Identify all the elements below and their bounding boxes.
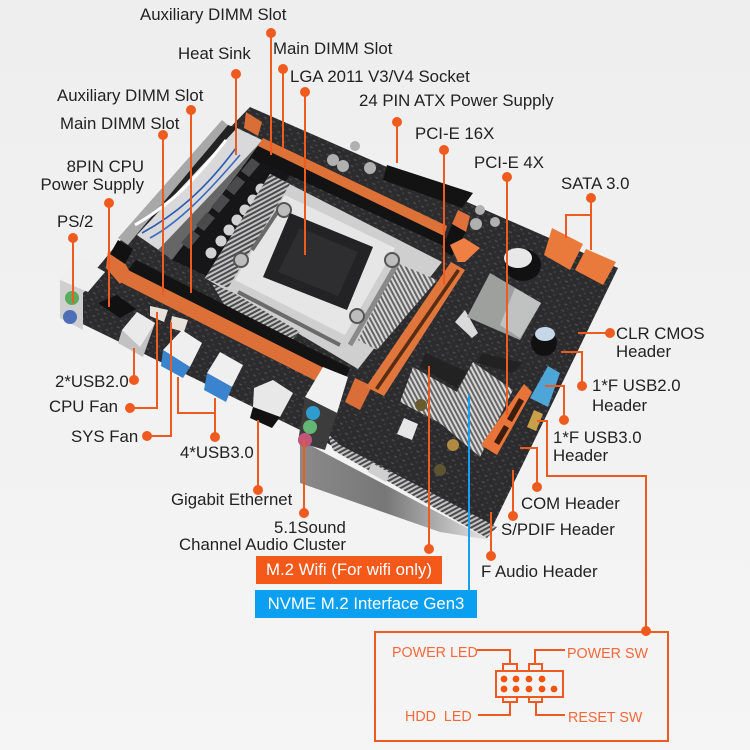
CPU socket cover — [263, 213, 373, 310]
PS/2 ports — [60, 258, 105, 330]
USB 2.0 ports — [118, 312, 155, 357]
line: 4*USB3.0 — [178, 377, 215, 437]
SATA ports — [544, 228, 616, 285]
line: gigabit ethernet — [257, 420, 259, 490]
retention rods — [238, 205, 340, 345]
ATX capacitors — [327, 141, 500, 230]
capacitor row — [206, 184, 266, 258]
label: 24 pin: 24 PIN ATX Power Supply — [359, 91, 554, 110]
label: LGA socket: LGA 2011 V3/V4 Socket — [290, 67, 470, 86]
label: F USB3.0: 1*F USB3.0 — [553, 428, 642, 447]
motherboard — [60, 107, 618, 538]
line: SYS fan — [147, 322, 171, 436]
fan headers — [150, 306, 188, 332]
left auxiliary DIMM slot — [128, 260, 350, 382]
line: 2*USB2.0 — [133, 348, 135, 380]
label: COM header: COM Header — [521, 494, 620, 513]
board shadow — [300, 440, 490, 540]
CMOS battery — [504, 248, 541, 281]
left DIMM latches — [106, 250, 130, 284]
line: auxiliary DIMM top — [270, 33, 272, 155]
label: gigabit ethernet: Gigabit Ethernet — [171, 490, 293, 509]
line: NVME M.2 — [468, 395, 470, 590]
Gigabit ethernet port — [250, 380, 293, 428]
label: power supply: Power Supply — [40, 175, 145, 194]
M.2 centre stripe plate — [440, 362, 513, 457]
label: CLR CMOS header: Header — [616, 342, 671, 361]
line: front panel — [537, 421, 646, 631]
M.2 wifi banner: M.2 Wifi (For wifi only) — [266, 560, 432, 579]
label: CPU fan: CPU Fan — [49, 397, 118, 416]
line: PCI-E 4X — [506, 177, 508, 415]
top main DIMM slot — [258, 138, 447, 236]
chipset heat sink — [467, 273, 541, 340]
label: main DIMM left: Main DIMM Slot — [60, 114, 180, 133]
label: 4*USB3.0: 4*USB3.0 — [180, 443, 254, 462]
leader lines — [73, 33, 646, 631]
line: F USB2.0 — [561, 352, 582, 386]
bottom striped edge — [327, 433, 497, 538]
M.2 wifi banner — [256, 556, 442, 584]
line: 24 pin — [396, 122, 398, 163]
power sw label: POWER SW — [567, 646, 649, 662]
NVME banner: NVME M.2 Interface Gen3 — [268, 594, 464, 613]
top auxiliary DIMM slot — [250, 146, 453, 250]
line: LGA socket — [304, 92, 306, 255]
audio jack cluster — [298, 367, 348, 450]
USB 3.0 front header — [530, 366, 560, 407]
line: CPU fan — [130, 312, 157, 408]
label: audio cluster: Channel Audio Cluster — [179, 535, 346, 554]
line: auxiliary DIMM left — [190, 110, 192, 293]
label: auxiliary DIMM top: Auxiliary DIMM Slot — [140, 5, 287, 24]
label: auxiliary DIMM left: Auxiliary DIMM Slot — [57, 86, 204, 105]
line: SATA — [566, 198, 591, 250]
label: SATA: SATA 3.0 — [561, 174, 629, 193]
reset sw label: RESET SW — [568, 710, 643, 726]
NVME banner — [255, 590, 477, 618]
line: 8 pin — [108, 203, 110, 307]
USB 2.0 front header — [527, 410, 543, 431]
M.2 left stripe plate — [400, 367, 457, 423]
line: M.2 wifi — [428, 366, 430, 549]
label: F USB3.0 header: Header — [553, 446, 608, 465]
panel connector dot — [641, 626, 651, 636]
line: CLR CMOS — [578, 332, 610, 334]
line: audio cluster — [303, 440, 305, 513]
hdd led label: HDD LED — [405, 709, 472, 725]
auxiliary black fin slot — [128, 125, 237, 245]
heat sink — [135, 128, 262, 260]
label: PCI-E 16X: PCI-E 16X — [415, 124, 494, 143]
QR label and screws — [397, 418, 418, 440]
line: PS/2 — [72, 238, 74, 303]
M.2 slots — [420, 353, 467, 388]
lower board crystal — [368, 463, 390, 482]
label: F USB2.0: 1*F USB2.0 — [592, 376, 681, 395]
USB 3.0 ports A — [161, 330, 202, 378]
heat sink fins — [118, 120, 228, 245]
label: F USB2.0 header: Header — [592, 396, 647, 415]
line: PCI-E 16X — [443, 150, 445, 285]
power led label: POWER LED — [392, 645, 478, 661]
line: F USB3.0 — [545, 386, 564, 420]
label: heat sink: Heat Sink — [178, 44, 251, 63]
label: 2*USB2.0: 2*USB2.0 — [55, 372, 129, 391]
label: CLR CMOS: CLR CMOS — [616, 324, 705, 343]
label: PS/2: PS/2 — [57, 212, 93, 231]
label: 5.1 sound: 5.1Sound — [274, 518, 346, 537]
line: COM header — [520, 448, 537, 487]
line: S/PDIF — [512, 470, 514, 516]
line: heat sink — [235, 74, 237, 155]
label: SYS fan: SYS Fan — [71, 427, 138, 446]
left main DIMM slot — [120, 270, 324, 382]
right DIMM latch — [452, 210, 470, 232]
leader dots — [68, 28, 615, 561]
label: PCI-E 4X: PCI-E 4X — [474, 153, 544, 172]
line: main DIMM top — [282, 69, 284, 148]
PCI-E 4X slot — [481, 384, 532, 455]
line: main DIMM left — [162, 135, 164, 295]
pin connector — [477, 650, 565, 715]
callout labels — [40, 5, 705, 581]
PCI-E 16X slot — [366, 238, 480, 396]
panel frame — [375, 632, 668, 741]
USB 3.0 ports B — [204, 352, 243, 402]
top DIMM latch — [244, 112, 262, 136]
line: F audio — [490, 512, 492, 556]
front panel diagram — [375, 626, 668, 741]
label: F audio: F Audio Header — [481, 562, 598, 581]
VRM block — [172, 142, 290, 280]
buzzer capacitor — [531, 327, 557, 356]
label: 8 pin: 8PIN CPU — [67, 157, 144, 176]
board base — [60, 107, 618, 538]
VRM chokes — [181, 158, 260, 249]
label: S/PDIF: S/PDIF Header — [501, 520, 615, 539]
label: main DIMM top: Main DIMM Slot — [273, 39, 393, 58]
socket ILM frame — [205, 174, 442, 369]
screws — [277, 203, 291, 217]
24 pin ATX connector — [383, 165, 473, 208]
crystal and chips — [455, 310, 478, 338]
8 pin CPU power connector — [98, 295, 136, 318]
